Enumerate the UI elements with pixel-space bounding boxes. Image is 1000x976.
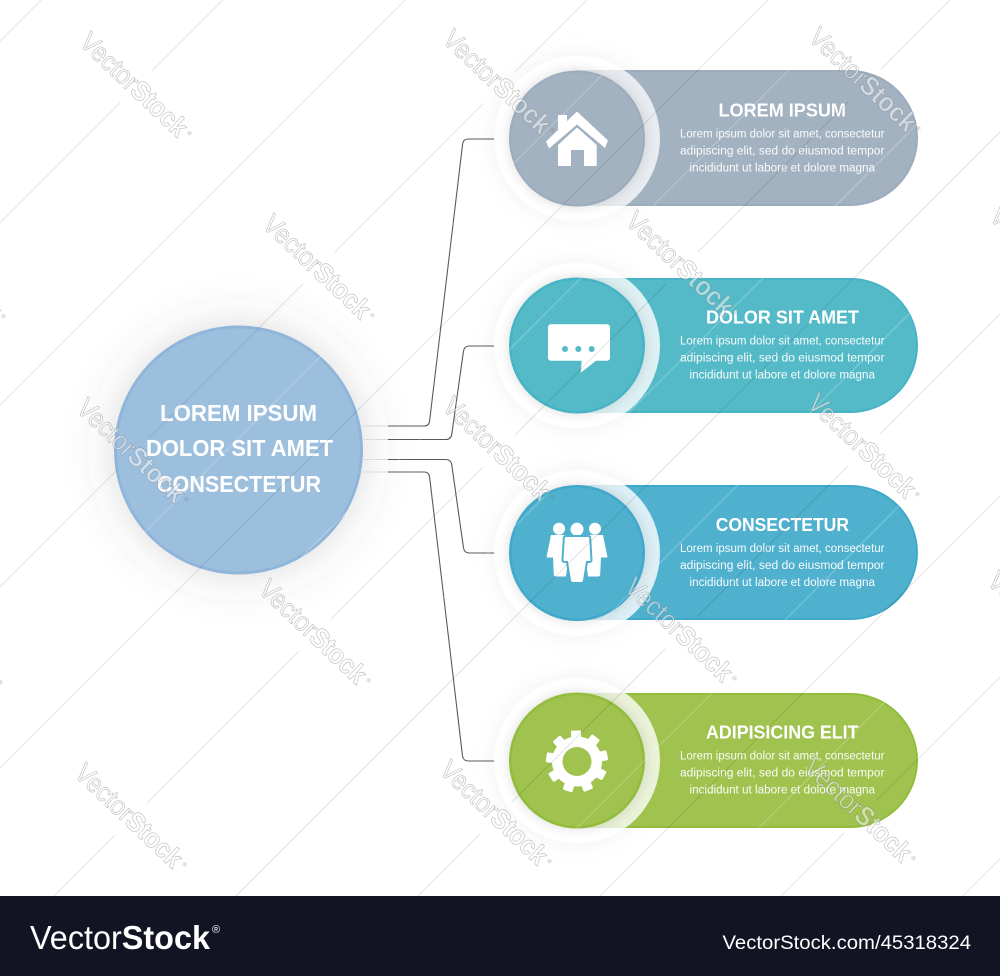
text block: dolor sit amet: adipiscing elit, sed do eiusmod tempor	[680, 352, 885, 364]
watermark: VectorStock	[437, 391, 558, 507]
watermark: ®	[731, 308, 740, 317]
watermark	[0, 210, 14, 331]
watermark: ®	[364, 676, 373, 685]
watermark: VectorStock	[798, 752, 919, 868]
watermark	[0, 576, 11, 697]
panel: adipisicing elit	[493, 676, 917, 844]
connector lines	[388, 139, 494, 761]
text block: dolor sit amet: incididunt ut labore et dolore magna	[690, 370, 876, 382]
central text	[146, 400, 333, 497]
text block: lorem ipsum: Lorem ipsum dolor sit amet, consectetur	[680, 128, 885, 140]
watermark: ®	[730, 674, 739, 683]
watermark: VectorStock	[253, 574, 374, 690]
footer logo: VectorStock	[30, 919, 211, 956]
text block: lorem ipsum: adipiscing elit, sed do eiusmod tempor	[680, 146, 885, 158]
watermark: VectorStock	[74, 27, 195, 143]
text block: consectetur	[680, 543, 885, 589]
watermark: VectorStock	[71, 393, 192, 509]
watermark: VectorStock	[802, 388, 923, 504]
watermark: VectorStock	[803, 22, 924, 138]
text block: adipisicing elit: Lorem ipsum dolor sit amet, consectetur	[680, 750, 885, 762]
footer bar	[0, 896, 1000, 976]
heading: adipisicing elit: ADIPISICING ELIT	[706, 722, 858, 742]
icon: people	[547, 523, 607, 583]
text block: consectetur: adipiscing elit, sed do eiusmod tempor	[680, 560, 885, 572]
watermark: ®	[913, 490, 922, 499]
central text: CONSECTETUR	[157, 471, 321, 497]
icon: house	[546, 112, 608, 166]
text block: lorem ipsum: incididunt ut labore et dolore magna	[690, 162, 876, 174]
watermark: ®	[185, 129, 194, 138]
central text: LOREM IPSUM	[160, 400, 317, 426]
panel: dolor sit amet	[493, 262, 917, 430]
icon: chat bubble	[548, 324, 610, 373]
text block: dolor sit amet	[680, 336, 885, 382]
heading: lorem ipsum: LOREM IPSUM	[718, 100, 846, 120]
watermark: ®	[182, 495, 191, 504]
text block: lorem ipsum	[680, 128, 885, 174]
panel: lorem ipsum	[493, 54, 917, 222]
watermark: VectorStock	[620, 206, 741, 322]
watermark: ®	[909, 854, 918, 863]
watermark: ®	[368, 311, 377, 320]
watermark: VectorStock	[437, 24, 558, 140]
watermark: ®	[180, 860, 189, 869]
watermark: VectorStock	[69, 758, 190, 874]
icon: gear	[546, 730, 608, 793]
heading: dolor sit amet: DOLOR SIT AMET	[706, 308, 859, 328]
watermark: ®	[548, 493, 557, 502]
footer logo: ®	[212, 924, 220, 936]
watermark: ®	[914, 124, 923, 133]
text block: dolor sit amet: Lorem ipsum dolor sit amet, consectetur	[680, 336, 885, 348]
central circle	[86, 298, 390, 602]
text block: consectetur: incididunt ut labore et dolore magna	[690, 577, 876, 589]
watermark: VectorStock	[619, 572, 740, 688]
panel: consectetur	[493, 469, 917, 637]
watermark: VectorStock	[434, 755, 555, 871]
watermark: VectorStock	[257, 209, 378, 325]
heading: consectetur: CONSECTETUR	[716, 515, 849, 535]
text block: adipisicing elit: adipiscing elit, sed do eiusmod tempor	[680, 768, 885, 780]
text block: adipisicing elit: incididunt ut labore et dolore magna	[690, 784, 876, 796]
central text: DOLOR SIT AMET	[146, 435, 333, 461]
text block: consectetur: Lorem ipsum dolor sit amet, consectetur	[680, 543, 885, 555]
text block: adipisicing elit	[680, 750, 885, 796]
connector stubs near central circle	[362, 426, 388, 472]
watermark: ®	[548, 126, 557, 135]
watermark: ®	[545, 857, 554, 866]
connector stubs near icons	[494, 139, 510, 761]
footer image id: VectorStock.com/45318324	[722, 933, 971, 954]
